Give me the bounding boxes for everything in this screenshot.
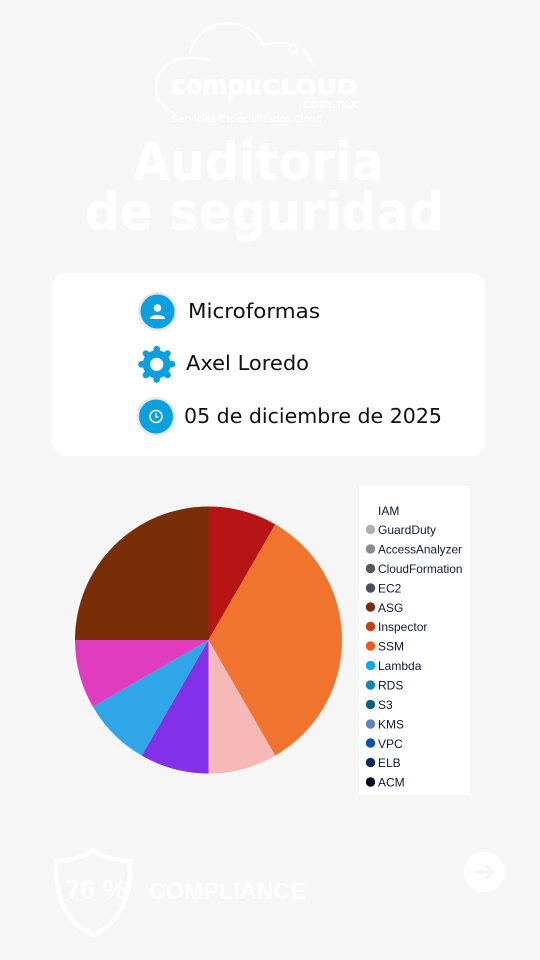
legend: KMS	[378, 718, 404, 732]
icon: clock	[136, 397, 176, 436]
compliance score: 76 %	[65, 875, 127, 905]
legend: EC2	[378, 582, 402, 596]
legend: S3	[378, 698, 393, 712]
legend: ASG	[378, 601, 403, 615]
slice: brown	[75, 506, 208, 640]
icon: cloud outline	[156, 23, 313, 113]
legend: GuardDuty	[378, 523, 436, 537]
date: 05 de diciembre de 2025	[184, 404, 442, 428]
legend: ACM	[378, 776, 405, 790]
icon: shield	[56, 850, 130, 935]
legend	[359, 486, 470, 795]
icon: cloud node	[289, 45, 297, 53]
logo tagline: Servicios Especializados Cloud	[172, 114, 322, 125]
slice: pink	[208, 640, 275, 774]
slice: red	[208, 506, 275, 640]
compliance label: COMPLIANCE	[149, 878, 306, 904]
logo wordmark: CLOUD	[262, 75, 358, 99]
legend: Inspector	[378, 620, 427, 634]
legend: ELB	[378, 756, 401, 770]
icon: user	[138, 292, 177, 331]
pie chart	[75, 506, 342, 774]
legend: IAM	[378, 504, 399, 518]
compliance badge	[56, 850, 306, 935]
legend: CloudFormation	[378, 562, 462, 576]
panel: audit details	[52, 273, 485, 456]
slice: blue	[93, 640, 208, 756]
legend: RDS	[378, 678, 403, 692]
logo domain: .com.mx	[298, 97, 359, 112]
title	[85, 132, 444, 243]
legend: Lambda	[378, 659, 422, 673]
logo wordmark: compu	[172, 70, 262, 101]
slice: orange	[208, 524, 342, 756]
title: Auditoria	[133, 132, 384, 193]
logo wordmark	[172, 70, 358, 101]
client name: Microformas	[188, 299, 320, 323]
author name: Axel Loredo	[186, 351, 309, 375]
title: de seguridad	[85, 182, 444, 243]
legend: SSM	[378, 640, 404, 654]
legend: AccessAnalyzer	[378, 542, 462, 556]
slice: magenta	[75, 640, 208, 707]
icon: arrow button	[464, 852, 505, 892]
legend: VPC	[378, 737, 403, 751]
icon: gear	[141, 349, 172, 380]
slice: purple	[142, 640, 208, 774]
logo: compucloud	[156, 23, 359, 125]
